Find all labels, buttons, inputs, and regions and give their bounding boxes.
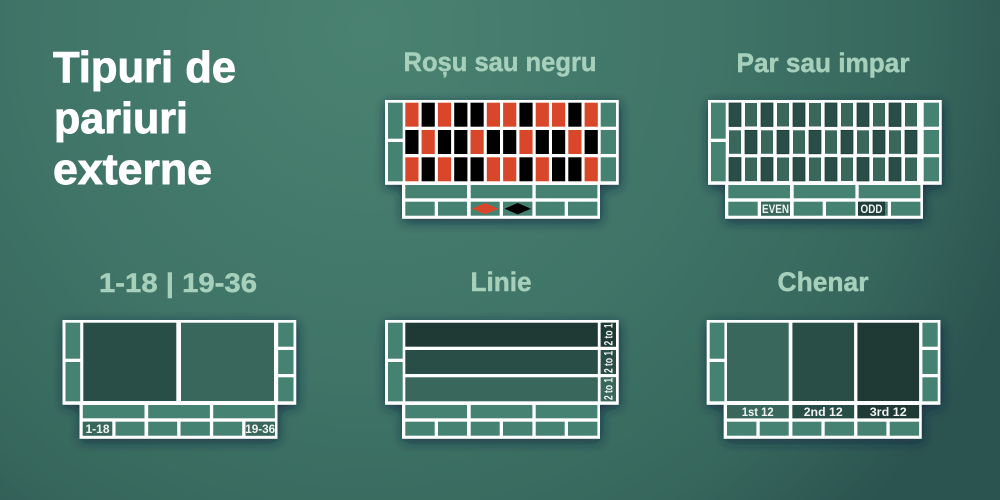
heading: Roșu sau negru: Roșu sau negru: [404, 47, 596, 77]
1st 12 label: 1st 12: [742, 405, 774, 419]
2 to 1 label bottom: [601, 377, 616, 401]
title: externe: [53, 145, 212, 194]
heading: Chenar: Chenar: [778, 267, 869, 297]
block: 1-18: [83, 323, 176, 401]
row: middle line: [405, 350, 598, 374]
heading: Linie: Linie: [470, 267, 532, 297]
block: second dozen: [792, 323, 854, 401]
title: pariuri: [54, 94, 188, 143]
2nd 12 label: 2nd 12: [804, 405, 843, 419]
2 to 1 label top: [601, 323, 616, 347]
1st 12 label: [727, 405, 789, 419]
panel: red or black table: [385, 100, 619, 219]
block: third dozen: [857, 323, 919, 401]
panel: even or odd table: [708, 100, 942, 219]
2 to 1 label top: 2 to 1: [602, 323, 616, 346]
2 to 1 label bottom: 2 to 1: [602, 378, 616, 400]
panel: line table: [385, 320, 619, 439]
title: [53, 43, 236, 194]
panel: dozen table: [707, 320, 940, 439]
2 to 1 label middle: 2 to 1: [602, 351, 616, 373]
title: Tipuri de: [53, 43, 236, 92]
1-18 label: 1-18: [86, 422, 110, 436]
row: bottom line: [405, 377, 598, 401]
3rd 12 label: 3rd 12: [870, 405, 907, 419]
EVEN label: EVEN: [762, 202, 789, 216]
icon: black diamond: [504, 203, 531, 214]
heading: Par sau impar: Par sau impar: [736, 48, 910, 78]
ODD label: ODD: [860, 202, 883, 216]
2nd 12 label: [792, 405, 854, 419]
block: first dozen: [727, 323, 789, 401]
heading: 1-18 | 19-36: 1-18 | 19-36: [99, 268, 257, 298]
dark number cells: [729, 103, 917, 181]
red number cells: [405, 103, 598, 181]
block: 19-36: [181, 323, 274, 401]
medium number cells: [729, 103, 917, 181]
panel: low or high table: [62, 320, 296, 439]
19-36 label: 19-36: [245, 422, 276, 436]
black number cells: [405, 103, 598, 181]
icon: red diamond: [472, 203, 498, 214]
3rd 12 label: [857, 405, 919, 419]
row: top line: [405, 323, 598, 347]
2 to 1 label middle: [601, 350, 616, 374]
